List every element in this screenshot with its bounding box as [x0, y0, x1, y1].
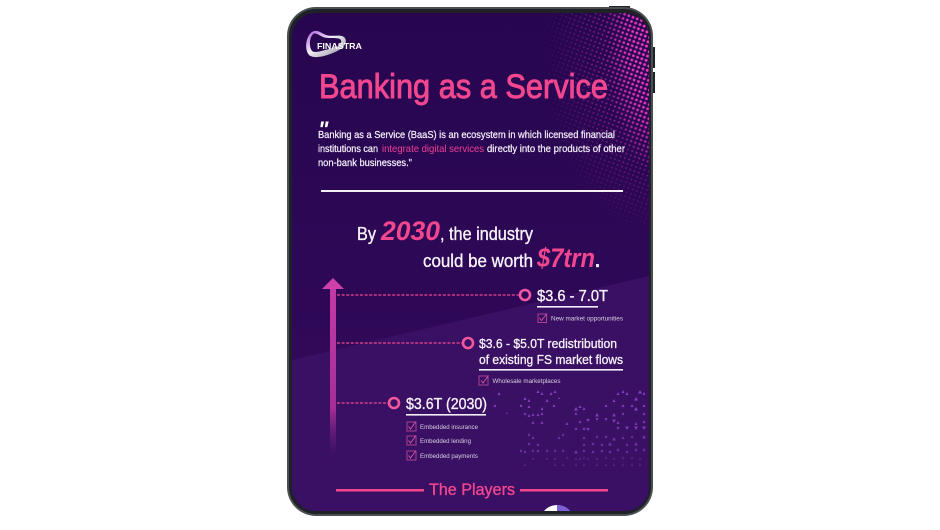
tier 3: $3.6T (2030) — [406, 396, 487, 413]
intro quote: non-bank businesses." — [318, 158, 412, 169]
quote mark: " — [318, 117, 329, 142]
tier 2: of existing FS market flows — [479, 352, 623, 367]
headline — [357, 216, 600, 273]
checklist: Embedded payments — [420, 453, 478, 460]
partial circle at bottom — [544, 505, 570, 511]
tier 2 — [337, 336, 623, 385]
tier 1 — [337, 288, 623, 322]
headline: could be worth — [423, 251, 533, 271]
tier 1: $3.6 - 7.0T — [537, 288, 608, 305]
intro quote — [318, 130, 625, 169]
tier 3 — [337, 396, 487, 460]
headline: By — [357, 224, 376, 244]
screen background — [292, 13, 649, 530]
intro quote: integrate digital services — [382, 144, 484, 155]
tier 1: New market opportunities — [551, 316, 623, 322]
triangle pattern — [494, 390, 646, 466]
checklist: Embedded lending — [420, 438, 471, 445]
checklist — [407, 422, 478, 460]
section heading: The Players: The Players — [429, 480, 515, 499]
logo — [306, 31, 362, 57]
growth arrow — [322, 278, 344, 460]
logo: FINASTRA — [317, 41, 362, 51]
halftone dots — [546, 13, 649, 232]
title: Banking as a Service — [319, 68, 608, 106]
intro quote: institutions can — [318, 144, 378, 155]
tier 2: $3.6 - $5.0T redistribution — [479, 336, 617, 351]
headline: , the industry — [440, 224, 533, 244]
intro quote: Banking as a Service (BaaS) is an ecosystem in which licensed financial — [318, 130, 615, 141]
intro quote: directly into the products of other — [487, 144, 625, 155]
tier 2: Wholesale marketplaces — [492, 378, 560, 385]
headline: $7trn — [536, 243, 595, 273]
checklist: Embedded insurance — [420, 424, 478, 431]
headline: 2030 — [380, 216, 440, 246]
divider — [321, 190, 623, 192]
headline: . — [595, 251, 600, 271]
tablet frame — [287, 6, 655, 516]
